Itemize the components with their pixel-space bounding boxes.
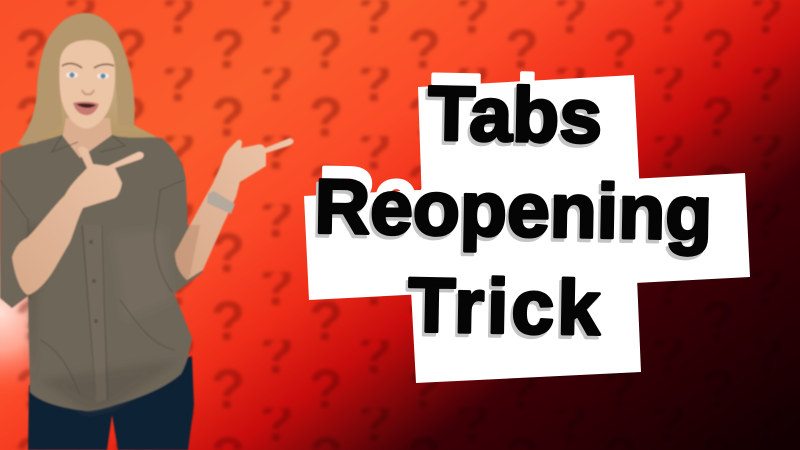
panel: bottom — [411, 278, 641, 383]
face — [59, 40, 115, 128]
pink glow at left edge — [0, 225, 90, 400]
headline drop shadow: Tabs — [425, 74, 600, 163]
shirt — [0, 135, 203, 411]
hair back — [18, 13, 165, 150]
white halo of headline letters — [318, 57, 719, 244]
mouth — [73, 102, 99, 115]
mouth opening — [76, 103, 96, 108]
neck — [62, 118, 112, 172]
right arm and pointing hand — [175, 138, 294, 280]
white title panels — [304, 75, 750, 383]
jeans — [28, 356, 194, 450]
panel: middle — [304, 173, 750, 300]
headline drop shadow: Reopening — [311, 167, 711, 260]
headline drop shadow — [310, 72, 712, 357]
headline: Reopening — [314, 164, 713, 256]
shirt buttons — [89, 240, 98, 323]
left arm and pointing hand — [12, 146, 144, 295]
headline drop shadow: Trick — [405, 266, 601, 355]
arm shadow — [175, 225, 200, 280]
shirt details — [0, 135, 184, 400]
headline: Trick — [408, 262, 604, 352]
white halo of headline letters: Tabs — [431, 58, 607, 148]
hair front — [18, 13, 134, 144]
shirt light placket — [84, 225, 106, 402]
headline — [312, 69, 715, 353]
eyes — [66, 72, 109, 79]
shirt shading — [28, 225, 180, 411]
panel: top — [418, 75, 640, 205]
nose — [82, 90, 94, 94]
eyebrows — [62, 64, 114, 68]
woman pointing photo — [0, 13, 294, 450]
white halo of headline letters: Reopening — [318, 152, 717, 244]
headline: Tabs — [427, 70, 603, 160]
wristwatch — [207, 191, 235, 214]
